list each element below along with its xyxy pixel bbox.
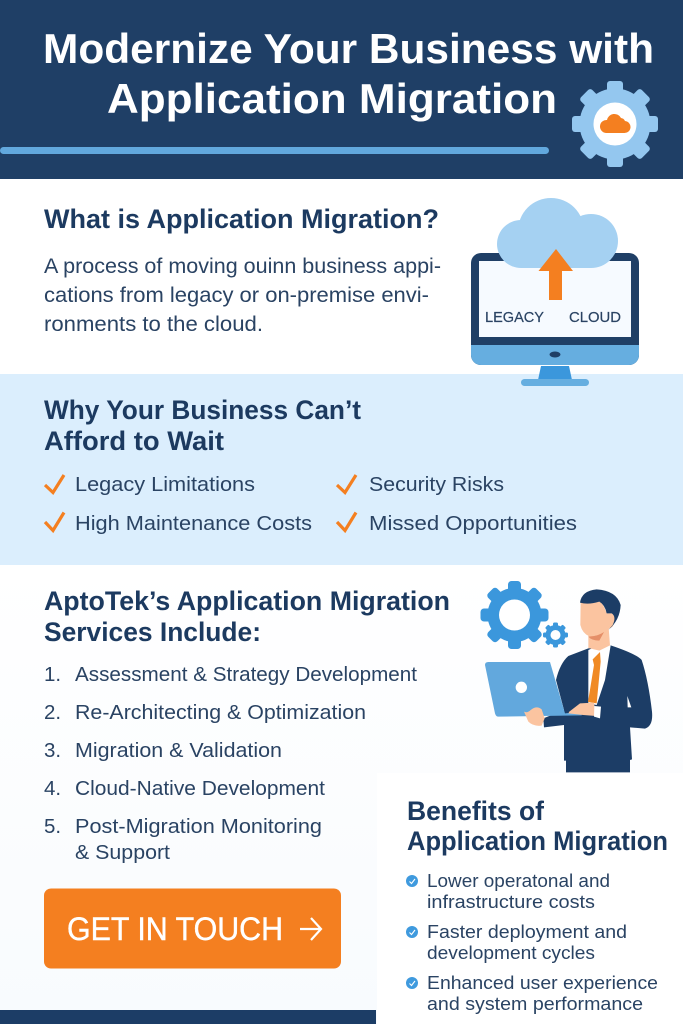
checklist: High Maintenance Costs <box>75 512 312 535</box>
panel: what is application migration <box>0 179 683 374</box>
panel: benefits <box>377 773 683 1024</box>
heading <box>44 586 450 647</box>
panel: services <box>0 565 683 1024</box>
icon: monitor with cloud upload: LEGACY <box>485 310 544 326</box>
header accent bar <box>0 147 549 154</box>
text block: definition: A process of moving ouinn business appi- <box>44 255 441 278</box>
benefit list: Lower operatonal and <box>427 870 610 891</box>
title: Modernize Your Business with <box>43 25 654 72</box>
numbered list: Re-Architecting & Optimization <box>75 701 366 724</box>
illustration: businessman with laptop and gears <box>480 581 652 772</box>
numbered list: Post-Migration Monitoring <box>75 815 322 838</box>
heading: Application Migration <box>407 826 668 856</box>
checklist: Legacy Limitations <box>75 473 255 496</box>
benefit list: development cycles <box>427 942 595 963</box>
benefit list: infrastructure costs <box>427 891 595 912</box>
benefit list: and system performance <box>427 993 643 1014</box>
heading <box>44 395 361 456</box>
icon: gears <box>480 581 568 649</box>
heading: Why Your Business Can’t <box>44 395 361 425</box>
heading: Services Include: <box>44 617 261 647</box>
heading <box>407 796 668 856</box>
icon: monitor with cloud upload: CLOUD <box>569 310 621 326</box>
numbered list: 5. <box>44 815 61 838</box>
button: get in touch <box>44 888 341 968</box>
panel: header <box>0 0 683 179</box>
checklist: Missed Opportunities <box>369 512 577 535</box>
text block: definition <box>44 255 441 336</box>
button: get in touch: GET IN TOUCH <box>67 911 283 947</box>
panel: why your business can't wait <box>0 374 683 565</box>
footer bar <box>0 1010 376 1024</box>
title <box>43 25 654 122</box>
heading: What is Application Migration? <box>44 204 439 234</box>
heading: AptoTek’s Application Migration <box>44 586 450 616</box>
numbered list: Migration & Validation <box>75 739 282 762</box>
numbered list: 4. <box>44 777 61 800</box>
text block: definition: ronments to the cloud. <box>44 313 263 336</box>
numbered list: Cloud-Native Development <box>75 777 325 800</box>
checklist: Security Risks <box>369 473 504 496</box>
icon: monitor with cloud upload <box>471 198 639 386</box>
benefit list: Faster deployment and <box>427 921 627 942</box>
heading: Benefits of <box>407 796 544 826</box>
text block: definition: cations from legacy or on-premise envi- <box>44 284 429 307</box>
numbered list: 3. <box>44 739 61 762</box>
numbered list: 2. <box>44 701 61 724</box>
numbered list: 1. <box>44 663 61 686</box>
title: Application Migration <box>107 75 557 122</box>
checklist <box>45 473 577 535</box>
benefit list: Enhanced user experience <box>427 972 658 993</box>
numbered list: Assessment & Strategy Development <box>75 663 417 686</box>
benefit list <box>406 870 658 1014</box>
numbered list <box>44 663 417 864</box>
numbered list: & Support <box>75 841 170 864</box>
figure: businessman <box>485 589 652 772</box>
icon: gear with cloud <box>572 81 658 167</box>
heading: Afford to Wait <box>44 426 224 456</box>
